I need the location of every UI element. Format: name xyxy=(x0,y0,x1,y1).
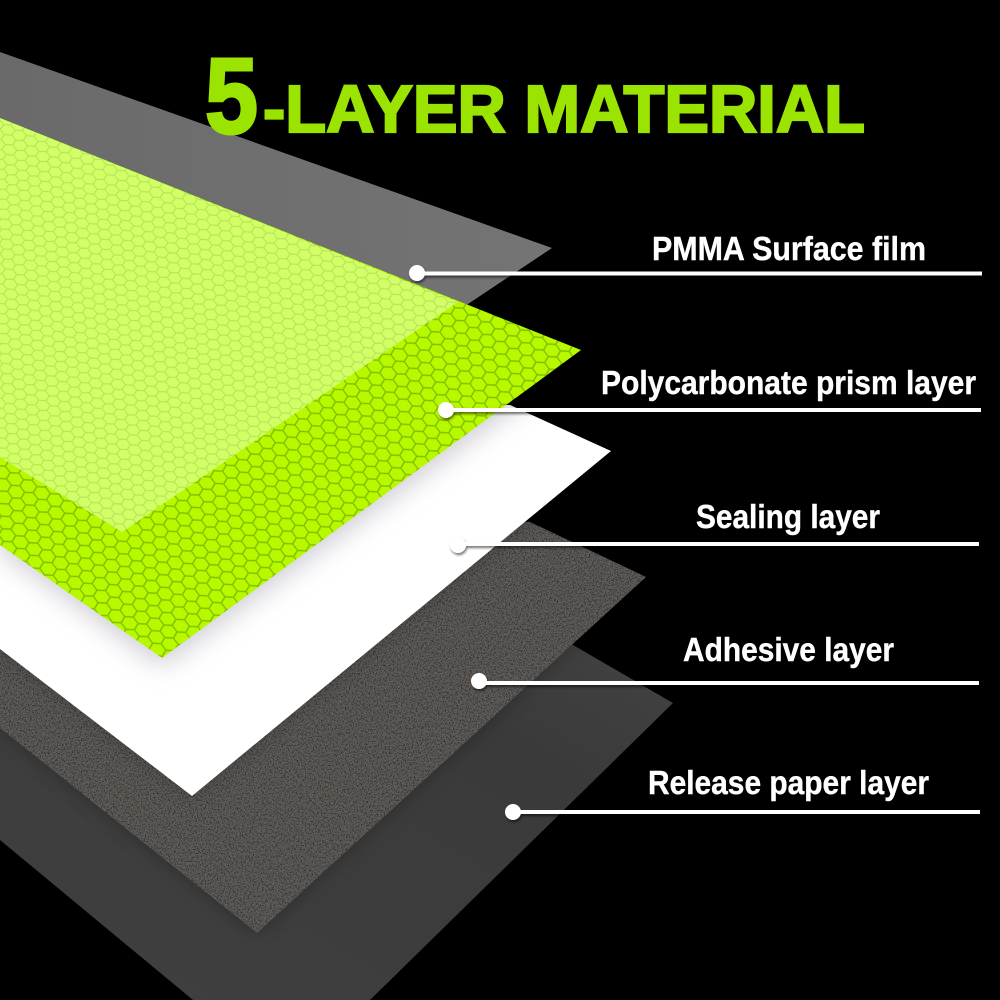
callout: Adhesive layer: Adhesive layer xyxy=(683,631,894,668)
layer: release paper sheet xyxy=(0,645,673,1000)
film overlap lightened hex area xyxy=(0,118,458,532)
title: -LAYER MATERIAL xyxy=(263,72,865,147)
callout: Release paper layer: Release paper layer xyxy=(648,764,929,801)
callout: PMMA Surface film: PMMA Surface film xyxy=(652,230,926,267)
title: 5 xyxy=(205,35,258,156)
callout: Polycarbonate prism layer xyxy=(438,364,981,418)
title xyxy=(205,35,865,156)
layer: polycarbonate prism green sheet xyxy=(0,118,581,658)
callout: Release paper layer xyxy=(505,764,980,820)
callout: Adhesive layer xyxy=(471,631,979,689)
callout: PMMA Surface film xyxy=(409,230,982,281)
callout: Sealing layer: Sealing layer xyxy=(696,498,880,535)
callout: Sealing layer xyxy=(450,498,979,553)
layer: adhesive sheet xyxy=(0,522,646,933)
layer: white sealing sheet xyxy=(0,404,611,796)
layer: PMMA surface film sheet xyxy=(0,52,552,306)
